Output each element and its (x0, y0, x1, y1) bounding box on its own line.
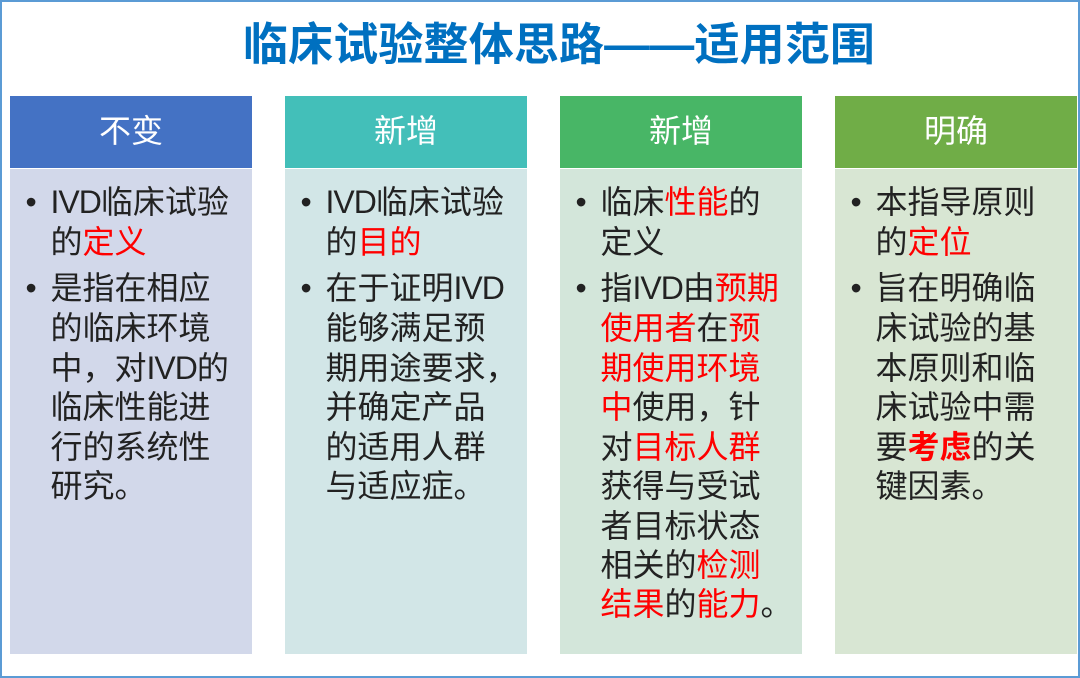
text: 定位 heading: 的定位 (876, 224, 972, 260)
body: definition text (10, 169, 252, 654)
text: purpose description: 能够满足预 (326, 310, 486, 346)
text: 性能 heading: 定义 (600, 224, 665, 260)
text: positioning description: 要考虑的关 (876, 429, 1036, 465)
text: performance description: 指IVD由预期 (600, 270, 779, 306)
text: performance description: 中使用，针 (600, 389, 761, 425)
bullet: • (300, 270, 312, 306)
text: positioning description (876, 270, 1036, 504)
text: positioning description: 旨在明确临 (876, 270, 1036, 306)
header: 新增: 新增 (649, 113, 713, 149)
header: 新增 (560, 96, 802, 168)
body: performance text (560, 169, 802, 654)
text: performance description: 结果的能力。 (600, 586, 793, 622)
body: purpose text (285, 169, 527, 654)
text: 目的 heading (326, 184, 504, 260)
text: 定义 heading: IVD临床试验 (50, 184, 229, 220)
header: 不变 (10, 96, 252, 168)
bullet: • (300, 184, 312, 220)
text: definition description (50, 270, 229, 504)
text: definition description: 临床性能进 (50, 389, 211, 425)
bullet: • (26, 184, 37, 220)
text: 目的 heading: IVD临床试验 (326, 184, 504, 220)
text: 性能 heading (600, 184, 761, 260)
bullet: • (576, 184, 587, 220)
text: performance description: 使用者在预 (600, 310, 761, 346)
text: positioning description: 床试验中需 (876, 389, 1036, 425)
title: 临床试验整体思路——适用范围 (243, 19, 875, 70)
header: 明确 (835, 96, 1077, 168)
text: definition description: 行的系统性 (50, 429, 211, 465)
text: 定位 heading (876, 184, 1036, 260)
header: 新增: 新增 (374, 113, 438, 149)
text: performance description: 期使用环境 (600, 350, 761, 386)
text: purpose description: 在于证明IVD (326, 270, 504, 306)
header: 明确: 明确 (924, 113, 988, 149)
bullet: • (850, 184, 862, 220)
panel: 明确 (835, 96, 1077, 654)
text: definition description: 的临床环境 (50, 310, 211, 346)
text: definition description: 是指在相应 (50, 270, 211, 306)
text: 定义 heading (50, 184, 229, 260)
text: positioning description: 键因素。 (876, 468, 1004, 504)
header: 新增 (285, 96, 527, 168)
panel: 不变 (10, 96, 252, 654)
text: 定义 heading: 的定义 (50, 224, 147, 260)
text: performance description: 相关的检测 (600, 547, 761, 583)
header: 不变: 不变 (99, 113, 163, 149)
text: positioning description: 本原则和临 (876, 350, 1036, 386)
text: performance description: 者目标状态 (600, 508, 761, 544)
panel: 新增 目的 (285, 96, 527, 654)
bullet: • (26, 270, 37, 306)
text: purpose description (326, 270, 518, 504)
text: 目的 heading: 的目的 (326, 224, 422, 260)
text: 定位 heading: 本指导原则 (876, 184, 1036, 220)
text: 性能 heading: 临床性能的 (600, 184, 761, 220)
text: performance description: 获得与受试 (600, 468, 761, 504)
bullet: • (850, 270, 862, 306)
panel: 新增 性能 (560, 96, 802, 654)
text: definition description: 中，对IVD的 (50, 350, 229, 386)
text: performance description (600, 270, 793, 622)
text: purpose description: 的适用人群 (326, 429, 486, 465)
text: purpose description: 并确定产品 (326, 389, 486, 425)
text: purpose description: 与适应症。 (326, 468, 486, 504)
body: positioning text (835, 169, 1077, 654)
text: purpose description: 期用途要求， (326, 350, 518, 386)
text: definition description: 研究。 (50, 468, 147, 504)
text: positioning description: 床试验的基 (876, 310, 1036, 346)
text: performance description: 对目标人群 (600, 429, 761, 465)
bullet: • (576, 270, 587, 306)
